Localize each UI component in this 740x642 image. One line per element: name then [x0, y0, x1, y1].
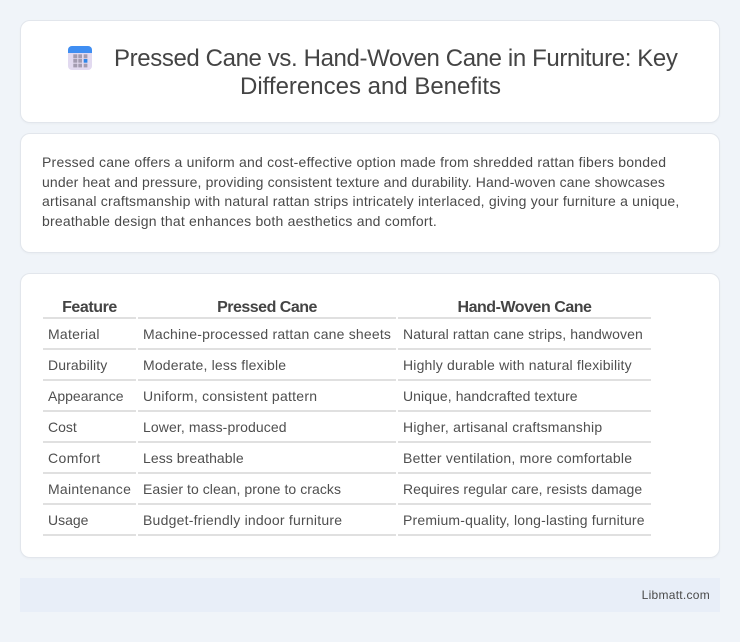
table: comparison: Better ventilation, more comfortable: [403, 450, 632, 466]
table: comparison: Machine-processed rattan cane sheets: [143, 326, 391, 342]
text block: introduction: Pressed cane offers a uniform and cost-effective option made from shredded rattan fibers bonded: [42, 154, 666, 170]
table: comparison: Budget-friendly indoor furniture: [143, 512, 342, 528]
text block: introduction: breathable design that enhances both aesthetics and comfort.: [42, 213, 437, 229]
title: Differences and Benefits: [240, 73, 501, 100]
table: comparison: Uniform, consistent pattern: [143, 388, 317, 404]
table: comparison: Premium-quality, long-lasting furniture: [403, 512, 645, 528]
text block: introduction: under heat and pressure, providing consistent texture and durability. Hand-woven cane showcases: [42, 174, 665, 190]
heading: Pressed Cane: Pressed Cane: [217, 299, 317, 316]
table: comparison: Less breathable: [143, 450, 244, 466]
footer text: Libmatt.com: [642, 588, 710, 602]
row: Durability: Durability: [48, 357, 107, 373]
text block: introduction: artisanal craftsmanship with natural rattan strips intricately interlaced, giving your furniture a unique,: [42, 193, 680, 209]
heading: Feature: Feature: [62, 299, 117, 316]
panel: title card: [20, 20, 720, 123]
row: Appearance: Appearance: [48, 388, 124, 404]
row: Material: Material: [48, 326, 100, 342]
panel: introduction: [20, 133, 720, 253]
title: Pressed Cane vs. Hand-Woven Cane in Furniture: Key: [114, 45, 678, 72]
table: comparison: Lower, mass-produced: [143, 419, 287, 435]
table: comparison: Moderate, less flexible: [143, 357, 286, 373]
table: comparison: [43, 299, 651, 536]
text block: introduction: [42, 154, 680, 229]
heading: Hand-Woven Cane: Hand-Woven Cane: [457, 299, 592, 316]
panel: comparison table: [20, 273, 720, 558]
row: Maintenance: Maintenance: [48, 481, 131, 497]
table: comparison: Requires regular care, resists damage: [403, 481, 642, 497]
row: Comfort: Comfort: [48, 450, 101, 466]
icon: calendar: [68, 46, 92, 70]
table: comparison: Highly durable with natural flexibility: [403, 357, 632, 373]
row: Cost: Cost: [48, 419, 77, 435]
footer bar: [20, 578, 720, 612]
table: comparison: Higher, artisanal craftsmanship: [403, 419, 602, 435]
row: Usage: Usage: [48, 512, 88, 528]
table: comparison: Easier to clean, prone to cracks: [143, 481, 341, 497]
title: [114, 45, 678, 100]
table: comparison: Unique, handcrafted texture: [403, 388, 578, 404]
table: comparison: Natural rattan cane strips, handwoven: [403, 326, 643, 342]
